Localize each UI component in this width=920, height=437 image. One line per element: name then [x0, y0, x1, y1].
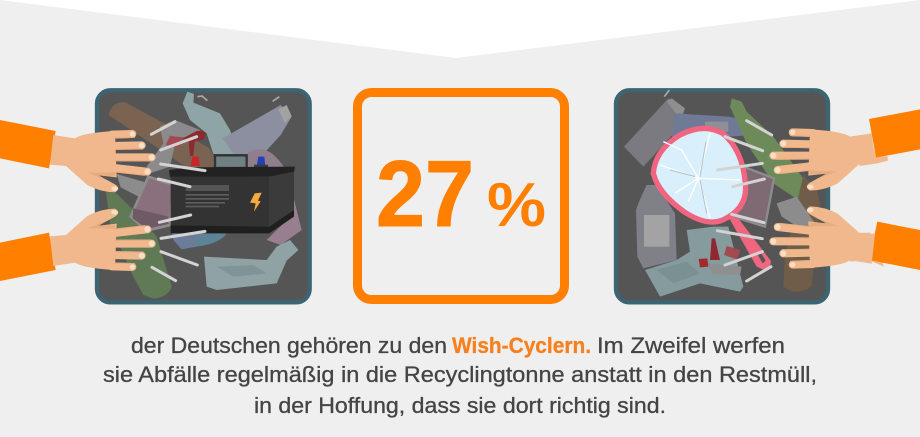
bin — [97, 90, 310, 302]
right upper arm and hand — [770, 109, 920, 191]
percent sign: % — [487, 171, 546, 240]
glass jar — [131, 177, 173, 231]
ribbed blue bottle — [672, 113, 755, 140]
grey spray bottle — [147, 120, 200, 173]
caption line 1: Im Zweifel werfen — [597, 333, 785, 358]
crumpled plastic bag — [645, 227, 743, 297]
panel: left bin with battery — [0, 90, 310, 302]
motion lines — [717, 121, 772, 281]
mauve bottle top — [246, 149, 284, 167]
number 27: 27 — [376, 141, 474, 246]
green bottle — [730, 98, 814, 203]
battery — [169, 155, 295, 233]
crumpled plastic bag — [204, 240, 298, 290]
green bottle — [106, 192, 172, 299]
left upper arm and hand — [0, 120, 155, 192]
periwinkle bottle — [223, 105, 292, 154]
battery terminals — [191, 157, 200, 166]
panel: center statistic — [358, 92, 564, 300]
white chevron header — [0, 0, 920, 58]
orange frame — [358, 92, 564, 300]
mauve bottle right — [267, 197, 302, 245]
grey bottle — [624, 98, 685, 167]
left lower arm and hand — [0, 209, 155, 281]
highlighted term: Wish-Cyclern. — [452, 333, 591, 358]
caption line 2: sie Abfälle regelmäßig in die Recyclingtonne anstatt in den Restmüll, — [103, 362, 817, 387]
small top marks — [197, 96, 279, 101]
caption line 3: in der Hoffung, dass sie dort richtig sind. — [254, 393, 666, 418]
brown bottle — [783, 175, 820, 292]
spray bottle parts — [707, 263, 742, 275]
brown bottle — [109, 102, 214, 167]
cracked mirror — [653, 128, 746, 222]
bin — [616, 90, 828, 302]
caption line 1 — [131, 333, 785, 358]
crumpled teal plastic — [183, 92, 237, 154]
right lower arm and hand — [770, 206, 920, 270]
threaded grey bottle — [777, 197, 815, 228]
motion lines — [151, 122, 205, 281]
small top mark — [664, 90, 669, 97]
threaded grey bottle — [117, 174, 149, 197]
pale grey bottle — [636, 185, 677, 268]
caption line 1: der Deutschen gehören zu den — [131, 333, 447, 358]
mirror handle — [728, 217, 771, 270]
caption text — [103, 333, 817, 418]
panel: right bin with mirror — [616, 90, 920, 302]
lightning icon — [250, 193, 262, 212]
blue items under battery — [172, 232, 227, 249]
battery handle — [215, 155, 247, 168]
glass jar — [733, 167, 774, 227]
